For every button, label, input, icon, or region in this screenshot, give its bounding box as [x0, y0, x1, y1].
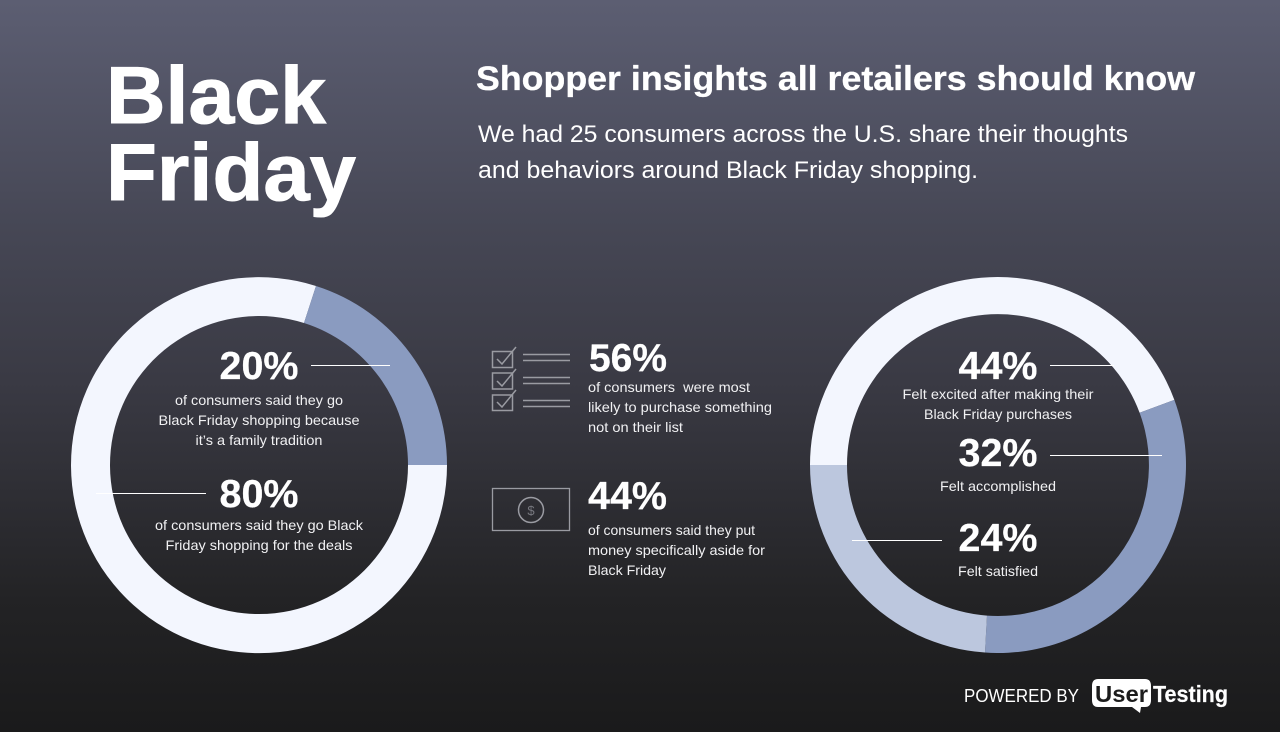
icon: dollar bill: $: [527, 503, 535, 518]
panel: middle stats: [492, 337, 772, 578]
stat: 20% family tradition: Black Friday shopping because: [158, 412, 360, 428]
logo: UserTesting: [1092, 679, 1228, 713]
stat: 20% family tradition: of consumers said they go: [175, 392, 343, 408]
donut: shopping motivation: [71, 277, 447, 653]
stat: 24% satisfied: Felt satisfied: [958, 563, 1038, 579]
stat: 24% satisfied: [852, 517, 1038, 579]
intro text: We had 25 consumers across the U.S. share their thoughts: [478, 121, 1128, 148]
stat: 80% deals: of consumers said they go Black: [155, 517, 364, 533]
stat: 20% family tradition: it’s a family tradition: [196, 432, 322, 448]
title: Friday: [106, 128, 356, 218]
stat: 44%: money specifically aside for: [588, 542, 765, 558]
stat: 44% excited: Felt excited after making their: [902, 386, 1094, 402]
stat: 56%: of consumers were most: [588, 379, 750, 395]
stat: 20% family tradition: [158, 345, 390, 448]
stat: 44% excited: 44%: [958, 345, 1038, 388]
title: Black: [106, 51, 327, 141]
stat: 32% accomplished: [940, 432, 1162, 494]
stat: 44%: 44%: [588, 475, 667, 518]
stat: 44% excited: Black Friday purchases: [924, 406, 1072, 422]
stat: 20% family tradition: 20%: [220, 345, 298, 388]
stat: 56%: [588, 337, 772, 435]
stat: 24% satisfied: 24%: [958, 517, 1038, 560]
stat: 32% accomplished: 32%: [958, 432, 1038, 475]
stat: 80% deals: 80%: [220, 473, 298, 516]
footer: powered by UserTesting: POWERED BY: [964, 686, 1079, 706]
panel: right donut chart: [810, 277, 1186, 653]
logo: UserTesting: Testing: [1153, 681, 1228, 707]
stat: 44%: of consumers said they put: [588, 522, 755, 538]
title: [106, 51, 356, 218]
donut: feelings after purchase: [810, 277, 1186, 653]
icon: checklist: [492, 347, 570, 410]
stat: 44% excited: [902, 345, 1114, 422]
stat: 56%: not on their list: [588, 419, 683, 435]
icon: dollar bill: [492, 488, 570, 530]
footer: powered by UserTesting: [964, 679, 1228, 713]
stat: 44%: Black Friday: [588, 562, 666, 578]
stat: 44%: [588, 475, 765, 578]
stat: 80% deals: [96, 473, 364, 553]
intro text: and behaviors around Black Friday shopping.: [478, 157, 978, 184]
intro text: [478, 121, 1128, 184]
stat: 56%: likely to purchase something: [588, 399, 772, 415]
stat: 80% deals: Friday shopping for the deals: [166, 537, 352, 553]
panel: left donut chart: [71, 277, 447, 653]
heading: shopper insights: Shopper insights all retailers should know: [476, 60, 1196, 98]
stat: 32% accomplished: Felt accomplished: [940, 478, 1056, 494]
stat: 56%: 56%: [589, 337, 667, 380]
logo: UserTesting: User: [1095, 681, 1148, 707]
